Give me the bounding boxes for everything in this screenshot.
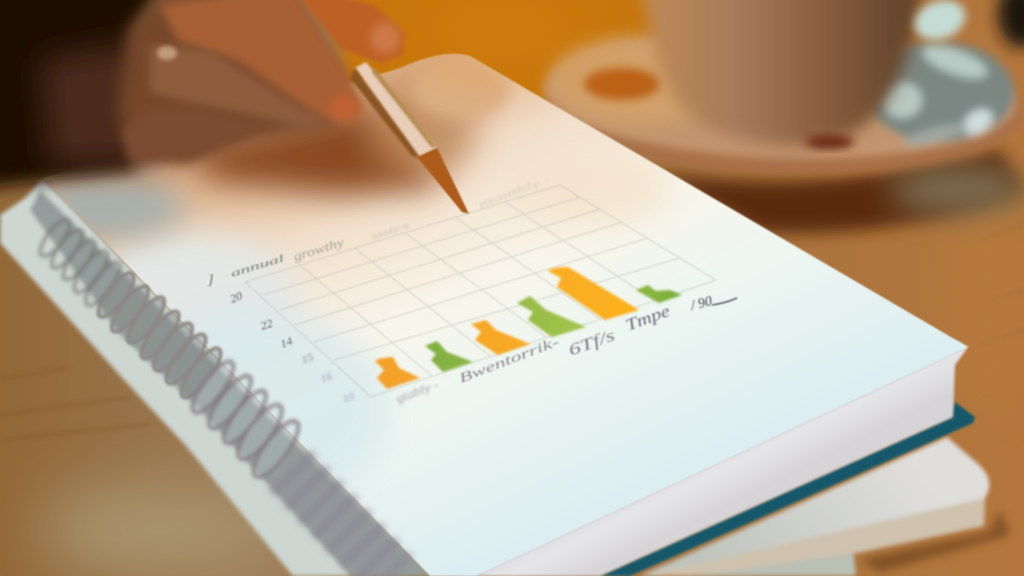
chart x-axis handwriting — [394, 294, 737, 406]
warm light glow over photo — [410, 0, 590, 70]
lower stack piece — [690, 546, 856, 576]
bracket mark: ] — [207, 273, 213, 288]
pen tip — [417, 148, 469, 214]
title second word: growthy — [291, 234, 346, 264]
green bar 4 — [517, 296, 586, 337]
palm — [118, 0, 350, 165]
y label 16: 16 — [318, 369, 334, 386]
pen body — [355, 62, 437, 158]
saucer — [545, 29, 1024, 181]
rings out of focus bottom — [290, 470, 392, 576]
y label 20: 20 — [228, 288, 244, 306]
hand holding pen — [0, 0, 405, 190]
coffee cup and saucer — [542, 0, 1024, 233]
saucer orange interior — [584, 68, 660, 100]
chart axis numbers — [228, 288, 356, 406]
spiral binding rings — [35, 216, 392, 576]
thumb — [285, 0, 405, 63]
finger joint highlight — [157, 46, 177, 60]
pen — [350, 62, 469, 214]
chart title handwriting — [207, 175, 552, 288]
middle finger — [150, 45, 325, 130]
chart grid — [245, 185, 716, 397]
index finger — [160, 0, 362, 122]
top surface — [640, 437, 989, 576]
lower finger — [122, 108, 270, 160]
cup body — [640, 0, 922, 146]
saucer underside shadow — [650, 150, 1024, 233]
table reflection beside saucer — [890, 164, 1024, 216]
dark sleeve and arm — [0, 0, 170, 190]
y label 14: 14 — [278, 334, 294, 351]
spiral binding cover strip — [0, 178, 430, 576]
second label: Bwentorrik- — [457, 335, 562, 387]
faint mark by pen tip: monthly · — [477, 175, 552, 211]
second notebook beneath — [640, 437, 989, 576]
third label: 6Tf/s — [566, 325, 618, 360]
bar chart — [245, 185, 716, 397]
shadow of stacked notebooks — [860, 510, 1010, 572]
value note with underline — [688, 294, 737, 314]
orange bar 3 — [471, 320, 530, 355]
y label 10: 10 — [340, 389, 356, 406]
teal cover of main notebook — [600, 402, 975, 576]
background orange glow — [340, 0, 680, 120]
rings in focus — [93, 268, 227, 403]
title words: annual — [230, 253, 286, 280]
green bar 2 — [425, 341, 473, 372]
rings fading lower — [186, 356, 305, 483]
orange bar 5 — [548, 267, 639, 320]
page shading — [25, 60, 670, 510]
orange bar 1 — [375, 357, 420, 389]
rings far out of focus — [35, 216, 126, 310]
cup top highlight — [909, 0, 971, 47]
y label 15: 15 — [299, 350, 315, 367]
faint title tail: sales — [369, 220, 411, 243]
first label: gtably - — [394, 377, 440, 406]
green bar 6 — [636, 285, 682, 303]
notebook page block side — [462, 340, 968, 576]
fourth label: Tmpe — [623, 301, 673, 335]
y label 22: 22 — [259, 316, 274, 333]
side edge — [640, 498, 985, 576]
fingertip on pen — [329, 95, 361, 121]
saucer silver reflection — [866, 39, 1014, 151]
value note with underline: / 90 — [688, 294, 714, 314]
